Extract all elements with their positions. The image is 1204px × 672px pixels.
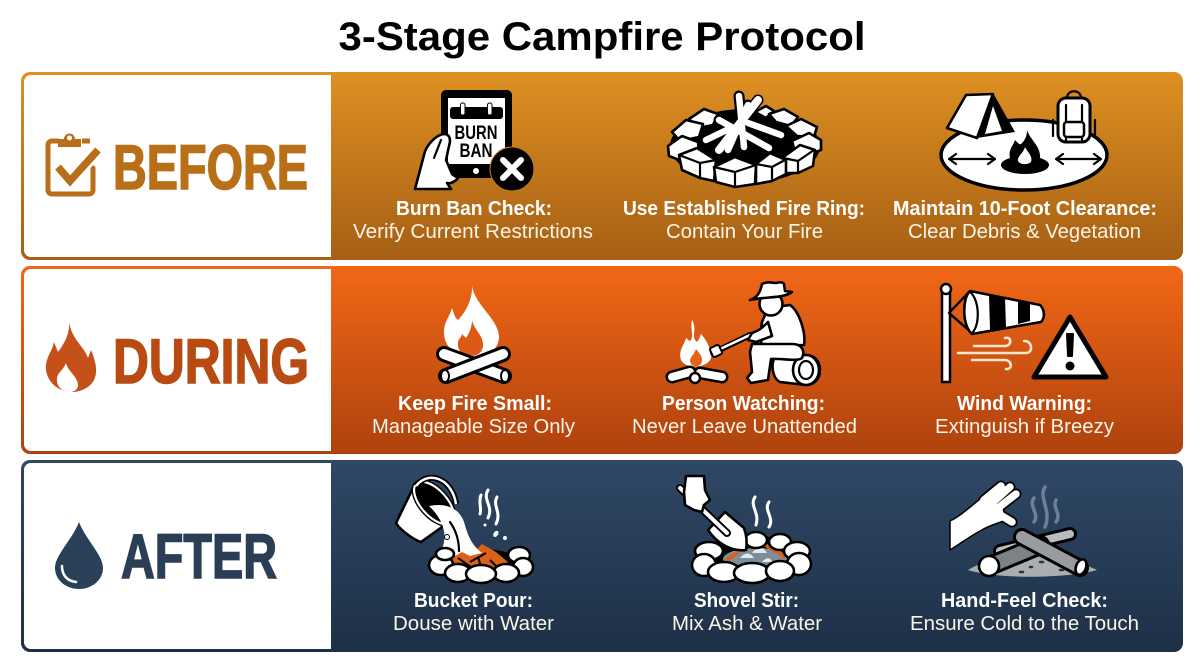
item: hand-feel check <box>910 486 1139 635</box>
stage label: before <box>48 133 308 203</box>
item: bucket pour: Bucket Pour: <box>414 590 533 612</box>
icon: hand over cold logs <box>950 486 1097 577</box>
item: bucket pour: Douse with Water <box>393 613 554 635</box>
icon: windsock and warning triangle <box>941 284 1106 382</box>
item: shovel stir: Shovel Stir: <box>694 590 799 612</box>
icon: stone fire ring <box>668 96 821 187</box>
item: keep fire small <box>372 285 575 438</box>
item: hand-feel check: Hand-Feel Check: <box>941 590 1108 612</box>
panel: after <box>21 460 1183 652</box>
icon: person tending fire <box>672 282 820 385</box>
icon: burn ban tablet: BAN <box>460 141 492 162</box>
item: person watching: Person Watching: <box>662 393 825 415</box>
panel: before <box>21 72 1183 260</box>
item: keep fire small: Keep Fire Small: <box>398 393 552 415</box>
item: wind warning: Wind Warning: <box>957 393 1092 415</box>
icon: flame <box>46 322 96 392</box>
item: fire ring: Contain Your Fire <box>666 221 823 243</box>
icon: burn ban tablet: BURN <box>454 123 498 144</box>
item: clearance: Clear Debris & Vegetation <box>908 221 1141 243</box>
icon: shovel stirring ash <box>680 476 811 583</box>
item: person watching: Never Leave Unattended <box>632 416 857 438</box>
item: clearance <box>893 91 1157 243</box>
item: shovel stir <box>672 476 822 635</box>
item: clearance: Maintain 10-Foot Clearance: <box>893 198 1157 220</box>
item: burn ban check: Burn Ban Check: <box>396 198 552 220</box>
item: fire ring: Use Established Fire Ring: <box>623 198 865 220</box>
icon: water drop <box>55 522 103 589</box>
item: keep fire small: Manageable Size Only <box>372 416 575 438</box>
item: fire ring <box>623 96 865 243</box>
icon: burn ban tablet <box>415 90 534 191</box>
heading: before: BEFORE <box>113 133 308 203</box>
icon: clearance around fire <box>941 91 1107 190</box>
stage label: during <box>46 322 309 397</box>
item: hand-feel check: Ensure Cold to the Touch <box>910 613 1139 635</box>
icon: bucket dousing fire <box>396 475 533 583</box>
item: bucket pour <box>393 475 554 635</box>
item: wind warning <box>935 284 1114 438</box>
item: person watching <box>632 282 857 438</box>
icon: clipboard check <box>48 134 98 194</box>
icon: small campfire <box>441 285 509 382</box>
title: 3-Stage Campfire Protocol <box>338 15 866 59</box>
item: burn ban check <box>353 90 593 243</box>
heading: during: DURING <box>113 327 309 397</box>
panel: during <box>21 266 1183 454</box>
heading: after: AFTER <box>121 522 277 592</box>
item: wind warning: Extinguish if Breezy <box>935 416 1114 438</box>
stage label: after <box>55 522 277 592</box>
item: shovel stir: Mix Ash & Water <box>672 613 822 635</box>
item: burn ban check: Verify Current Restrictions <box>353 221 593 243</box>
